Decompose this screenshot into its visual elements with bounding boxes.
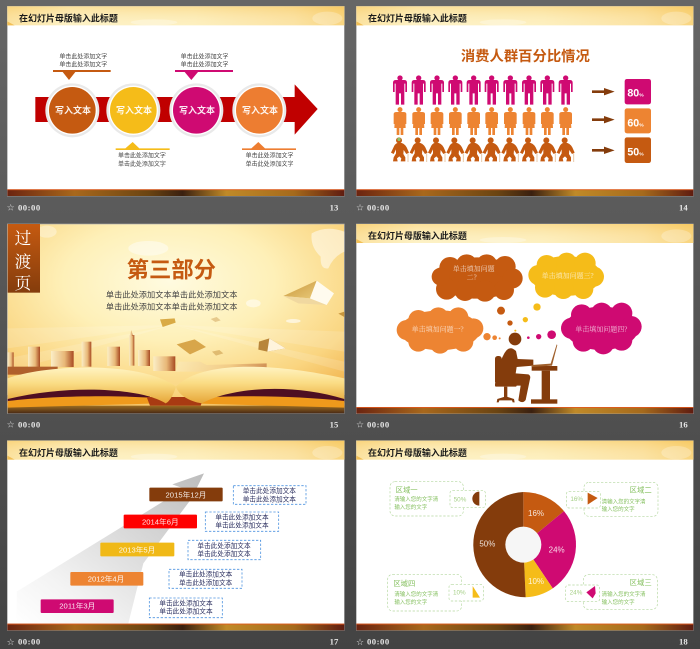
callout: region 4: 区域四 xyxy=(393,579,415,588)
callout: region 2: 区域二 xyxy=(630,485,652,494)
value 50%: 50% xyxy=(627,147,644,159)
slide frame xyxy=(356,224,693,414)
note 2011: 单击此处添加文本 xyxy=(159,607,213,616)
circle step 1 xyxy=(45,83,99,137)
date 2013 xyxy=(100,543,174,556)
footer time: 00:00 xyxy=(18,419,41,429)
heading: 在幻灯片母版输入此标题 xyxy=(368,230,467,241)
arrow 50 xyxy=(592,147,615,154)
cloud: question 1 xyxy=(397,307,483,354)
cloud: question 2 xyxy=(432,254,523,302)
callout: region 4: 10% xyxy=(453,590,466,597)
footer time xyxy=(7,637,41,648)
date 2015: 2015年12月 xyxy=(166,489,206,499)
heading: 在幻灯片母版输入此标题 xyxy=(368,447,467,458)
callout: region 2: 清输入您的文字清 xyxy=(602,497,646,505)
heading: 在幻灯片母版输入此标题 xyxy=(19,447,118,458)
value 50% xyxy=(625,137,651,163)
footer time: 00:00 xyxy=(18,202,41,212)
footer time: ☆ xyxy=(7,421,15,431)
cloud: question 3 xyxy=(528,253,604,299)
date 2011: 2011年3月 xyxy=(59,601,95,611)
callout: region 1: 50% xyxy=(454,497,467,504)
cloud: question 2: 单击填加问题 xyxy=(453,264,495,273)
footer time xyxy=(356,202,390,214)
circle step 4 xyxy=(232,83,286,137)
cloud: question 4 xyxy=(561,303,642,354)
callout: region 1: 区域一 xyxy=(396,486,418,495)
note 2014: 单击此处添加文本 xyxy=(215,512,269,521)
background sky xyxy=(7,224,344,413)
panel: slide 16 thought clouds xyxy=(356,224,693,431)
callout bottom 2: 单击此处添加文字 xyxy=(246,160,294,168)
cloud: question 1: 单击填加问题一? xyxy=(412,325,464,334)
footer time: 00:00 xyxy=(367,419,390,429)
panel: slide 15 section divider xyxy=(7,224,344,431)
page number: 14 xyxy=(679,202,688,212)
page number: 15 xyxy=(330,419,339,429)
note 2015: 单击此处添加文本 xyxy=(243,494,296,503)
note 2014: 单击此处添加文本 xyxy=(215,521,269,530)
note 2012: 单击此处添加文本 xyxy=(179,570,233,579)
gray rising arrow xyxy=(17,473,204,623)
footer time: 00:00 xyxy=(18,637,41,647)
date 2014 xyxy=(124,515,197,528)
callout top 1 xyxy=(53,52,111,80)
callout: region 3: 24% xyxy=(570,589,583,596)
note 2011: 单击此处添加文本 xyxy=(159,598,213,607)
section tag: 过 xyxy=(15,229,32,248)
callout top 2: 单击此处添加文字 xyxy=(181,61,229,69)
arrow 60 xyxy=(592,116,615,123)
callout bottom 2: 单击此处添加文字 xyxy=(246,152,294,160)
panel: slide 17 timeline xyxy=(7,441,344,648)
section tag: 渡 xyxy=(15,252,32,271)
arrow 80 xyxy=(592,88,615,95)
page number: 18 xyxy=(679,637,688,647)
panel: slide 18 donut regions xyxy=(356,441,693,648)
heading: 在幻灯片母版输入此标题 xyxy=(19,13,118,24)
section title: 第三部分 xyxy=(127,257,216,282)
callout top 1: 单击此处添加文字 xyxy=(59,61,107,69)
callout top 2: 单击此处添加文字 xyxy=(181,52,229,60)
callout bottom 1 xyxy=(116,142,170,168)
value 80%: 80% xyxy=(627,88,644,100)
callout: region 2: 16% xyxy=(570,496,583,503)
thought bubbles xyxy=(483,303,556,340)
donut chart xyxy=(473,492,576,597)
date 2012: 2012年4月 xyxy=(88,574,124,584)
slide frame xyxy=(356,6,693,196)
slide frame xyxy=(7,441,344,630)
note 2013: 单击此处添加文本 xyxy=(197,541,251,550)
callout: region 4 xyxy=(388,574,483,611)
date 2011 xyxy=(41,599,114,613)
donut chart: 50% xyxy=(479,539,495,548)
pictogram row: elders xyxy=(391,137,575,162)
footer time: ☆ xyxy=(356,638,364,648)
slide frame xyxy=(356,441,693,630)
cloud: question 3: 单击填加问题三? xyxy=(542,271,594,280)
note 2015 xyxy=(233,486,306,504)
callout bottom 1: 单击此处添加文字 xyxy=(118,160,166,168)
flying books xyxy=(160,281,344,356)
circle step 3: 写入文本 xyxy=(179,104,215,115)
cloud: question 2: 二? xyxy=(467,274,477,282)
value 60% xyxy=(625,108,651,133)
heading: 在幻灯片母版输入此标题 xyxy=(368,13,467,24)
city skyline xyxy=(8,330,267,375)
footer time xyxy=(356,419,390,431)
donut chart: 10% xyxy=(528,577,544,586)
footer time: ☆ xyxy=(356,204,364,214)
callout: region 1: 清输入您的文字清 xyxy=(394,495,439,503)
callout: region 2 xyxy=(566,482,658,516)
section tag: 页 xyxy=(15,274,32,293)
note 2013 xyxy=(188,540,261,560)
note 2012 xyxy=(169,569,242,588)
note 2015: 单击此处添加文本 xyxy=(243,486,296,495)
section subtitle: 单击此处添加文本单击此处添加文本 xyxy=(106,290,237,300)
footer time xyxy=(356,637,390,648)
footer time: ☆ xyxy=(356,421,364,431)
open book xyxy=(8,367,344,413)
footer time: 00:00 xyxy=(367,637,390,647)
date 2015 xyxy=(149,488,223,501)
note 2013: 单击此处添加文本 xyxy=(197,549,251,558)
section tag xyxy=(8,224,40,293)
callout bottom 2 xyxy=(242,142,296,168)
footer time xyxy=(7,419,41,431)
pictogram row: men xyxy=(393,75,573,105)
footer time: 00:00 xyxy=(367,202,390,212)
page number: 16 xyxy=(679,419,688,429)
callout: region 3: 清输入您的文字清 xyxy=(602,590,646,598)
panel: slide 13 process arrow xyxy=(7,6,344,214)
red arrow xyxy=(35,84,318,135)
donut chart: 24% xyxy=(549,545,565,554)
value 80% xyxy=(625,79,651,104)
callout: region 4: 清输入您的文字清 xyxy=(394,590,439,598)
page number: 17 xyxy=(330,637,339,647)
circle step 3 xyxy=(169,83,223,137)
callout: region 3: 区域三 xyxy=(630,578,652,587)
section subtitle xyxy=(106,290,237,311)
footer time: ☆ xyxy=(7,638,15,648)
slide frame xyxy=(7,6,344,196)
note 2011 xyxy=(149,598,222,618)
page number: 13 xyxy=(330,202,339,212)
circle step 1: 写入文本 xyxy=(55,104,91,115)
callout: region 4: 输入您的文字 xyxy=(394,598,428,606)
note 2014 xyxy=(205,512,279,531)
pictogram row: women xyxy=(394,107,572,135)
callout bottom 1: 单击此处添加文字 xyxy=(118,152,166,160)
callout: region 3: 输入您的文字 xyxy=(602,598,635,606)
donut chart: 16% xyxy=(528,509,544,518)
date 2014: 2014年6月 xyxy=(142,516,179,526)
callout: region 1 xyxy=(390,482,485,516)
callout: region 2: 输入您的文字 xyxy=(602,505,635,513)
value 60%: 60% xyxy=(627,117,644,129)
footer time: ☆ xyxy=(7,204,15,214)
cloud: question 4: 单击填加问题四? xyxy=(575,324,627,333)
circle step 2 xyxy=(106,83,160,137)
date 2013: 2013年5月 xyxy=(119,544,155,554)
circle step 2: 写入文本 xyxy=(116,104,152,115)
note 2012: 单击此处添加文本 xyxy=(179,578,233,587)
callout: region 3 xyxy=(566,575,657,609)
callout top 2 xyxy=(175,52,233,80)
date 2012 xyxy=(70,572,143,586)
chart title: 消费人群百分比情况 xyxy=(461,47,590,65)
panel: slide 14 consumer percentage xyxy=(356,6,693,214)
section subtitle: 单击此处添加文本单击此处添加文本 xyxy=(106,301,237,311)
icon: person at desk xyxy=(495,333,557,404)
footer time xyxy=(7,202,41,214)
callout top 1: 单击此处添加文字 xyxy=(59,52,107,60)
callout: region 1: 输入您的文字 xyxy=(394,503,428,511)
circle step 4: 写入文本 xyxy=(242,104,278,115)
